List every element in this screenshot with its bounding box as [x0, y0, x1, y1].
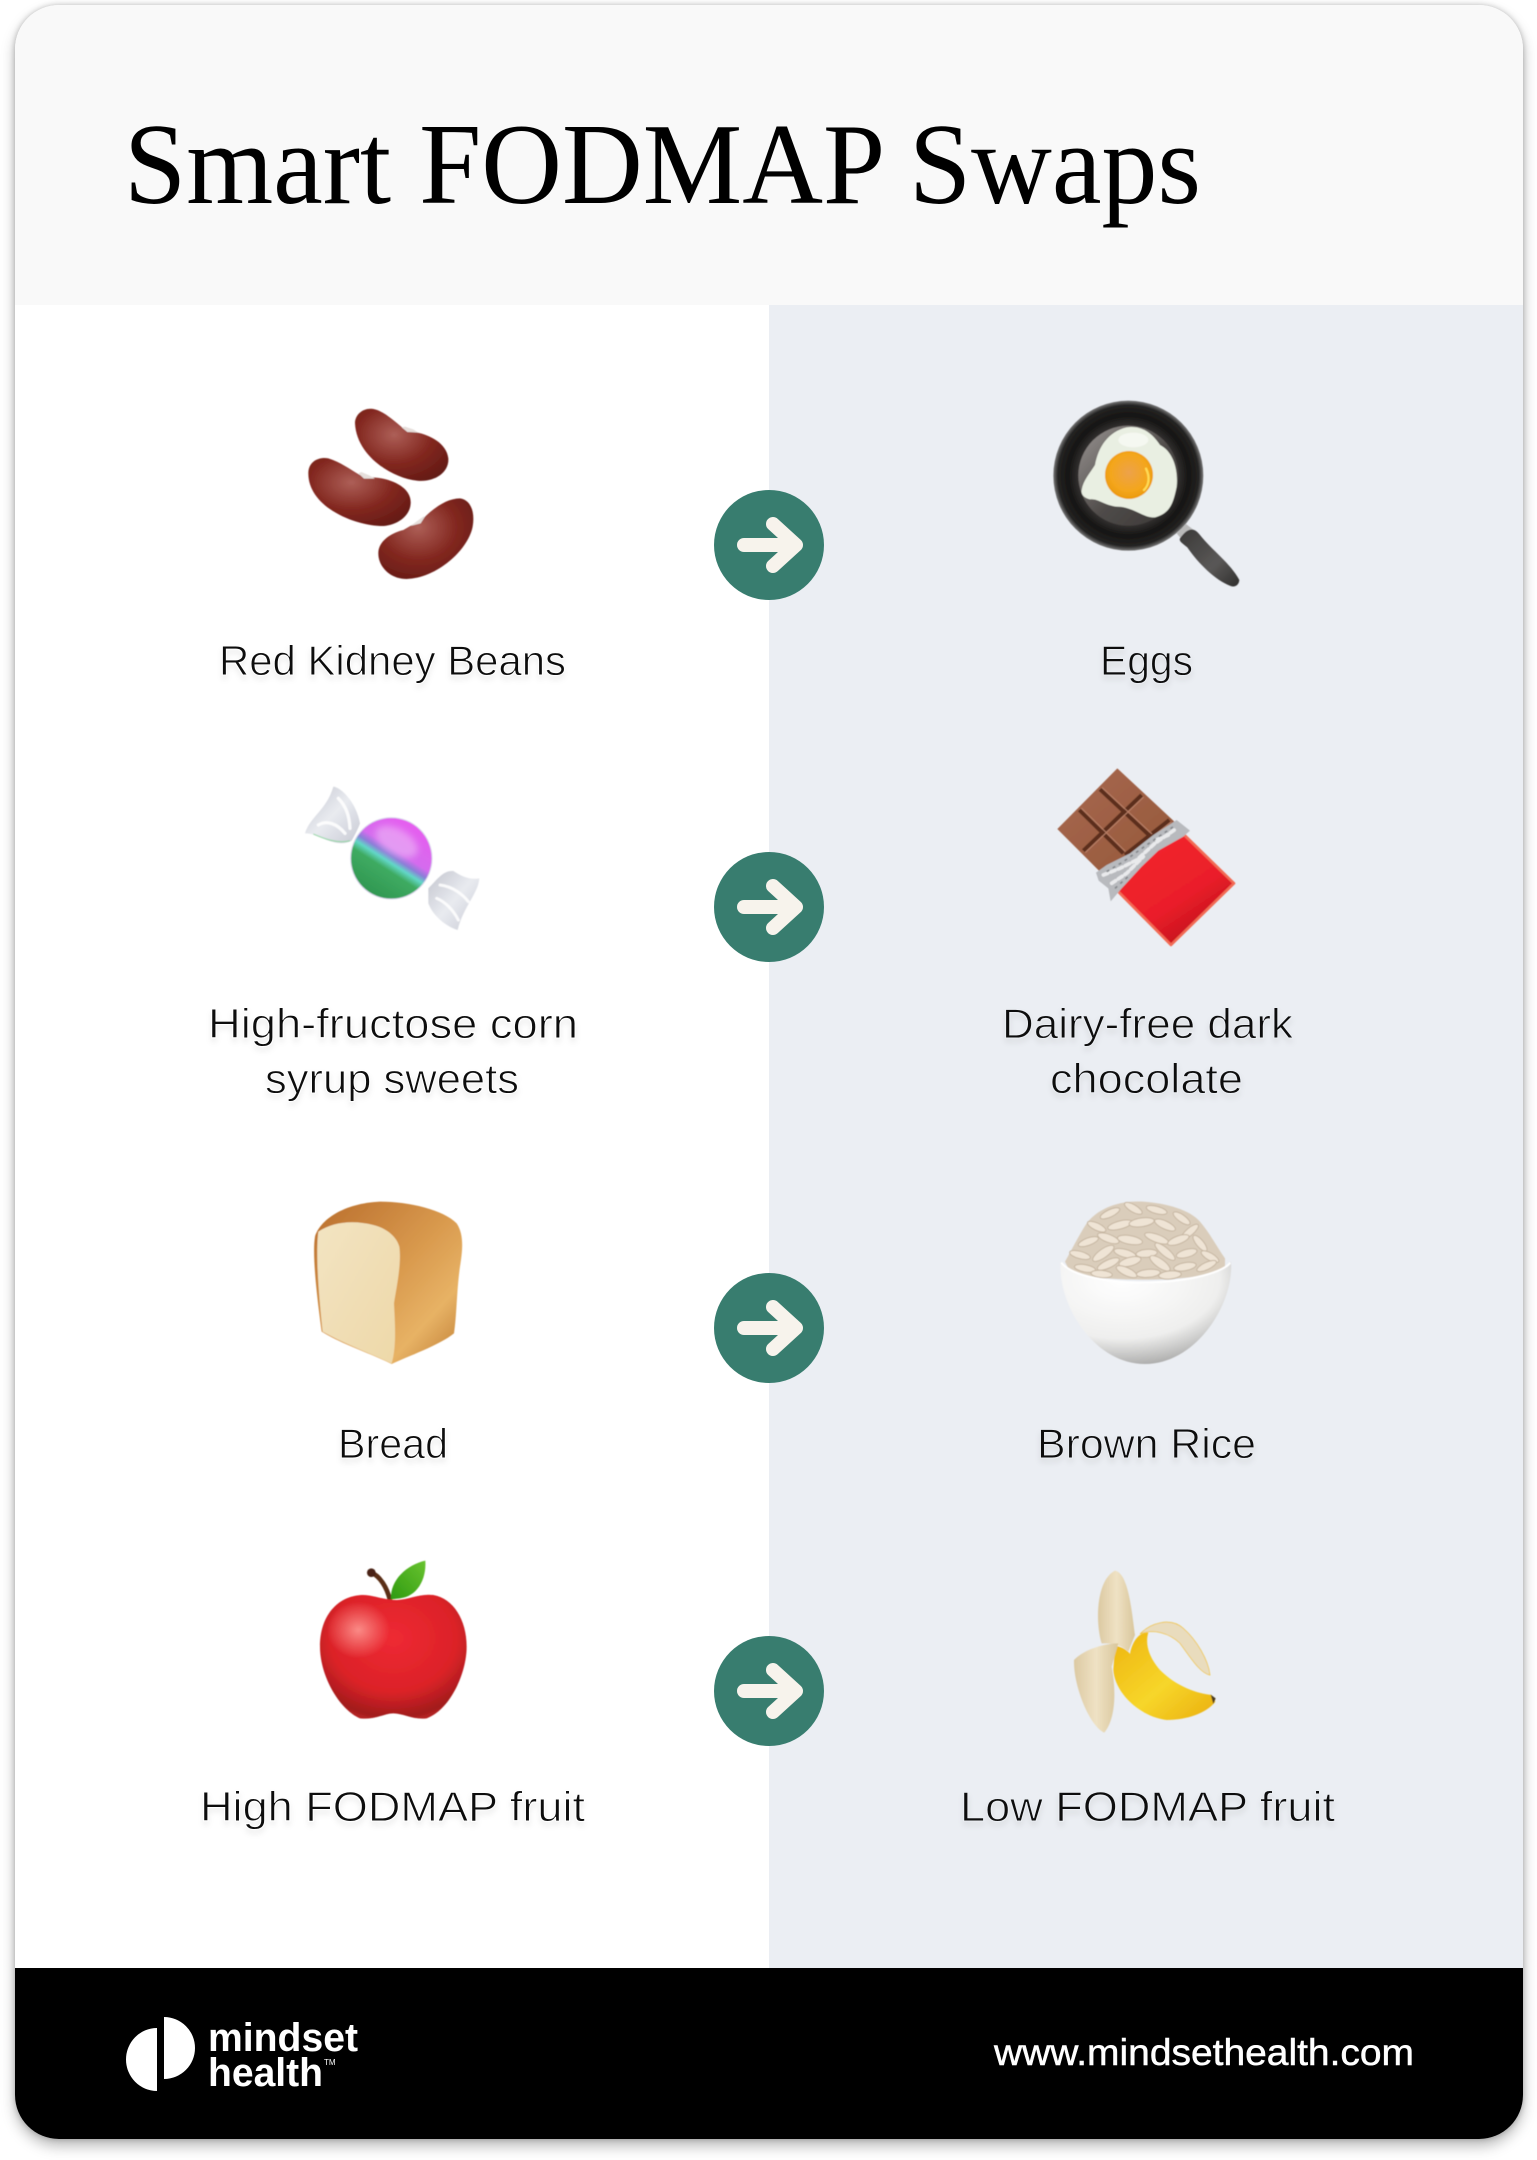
label: High-fructose corn syrup sweets: High-fructose corn	[208, 1000, 578, 1047]
icon: red kidney beans	[308, 409, 473, 579]
header panel	[15, 5, 1523, 305]
label: Dairy-free dark chocolate: chocolate	[1050, 1055, 1243, 1102]
icon: peeled banana	[1074, 1571, 1216, 1733]
icon: bread loaf	[314, 1202, 462, 1364]
icon: chocolate bar	[1057, 768, 1234, 945]
panel: low FODMAP swaps	[769, 305, 1523, 1968]
label: Low FODMAP fruit: Low FODMAP fruit	[960, 1783, 1335, 1830]
logo wordmark: mindset	[208, 2016, 358, 2060]
logo mark	[126, 2017, 195, 2091]
icon: red apple	[320, 1561, 467, 1719]
label: Dairy-free dark chocolate: Dairy-free dark	[1002, 1000, 1294, 1047]
icon: fried egg in pan	[1053, 401, 1239, 586]
logo: mindset health: health	[208, 2051, 323, 2095]
label: Red Kidney Beans: Red Kidney Beans	[219, 637, 566, 684]
icon: bowl of rice	[1060, 1200, 1231, 1364]
arrow button 3	[714, 1273, 824, 1383]
label: High-fructose corn syrup sweets: syrup sweets	[265, 1055, 519, 1102]
logo: mindset health: TM	[324, 2058, 336, 2067]
label: High-fructose corn syrup sweets	[208, 1000, 578, 1102]
arrow button 1	[714, 490, 824, 600]
label: Eggs: Eggs	[1100, 637, 1193, 684]
logo: mindset health	[126, 2016, 358, 2095]
label: High FODMAP fruit: High FODMAP fruit	[200, 1783, 585, 1830]
label: Dairy-free dark chocolate	[1002, 1000, 1294, 1102]
panel: high FODMAP foods	[15, 305, 769, 1968]
website URL: www.mindsethealth.com	[993, 2032, 1414, 2073]
title: Smart FODMAP Swaps	[124, 101, 1201, 228]
icon: wrapped candy	[305, 787, 479, 930]
label: Bread: Bread	[338, 1420, 448, 1467]
arrow button 4	[714, 1636, 824, 1746]
footer panel	[15, 1968, 1523, 2139]
label: Brown Rice: Brown Rice	[1037, 1420, 1256, 1467]
arrow button 2	[714, 852, 824, 962]
